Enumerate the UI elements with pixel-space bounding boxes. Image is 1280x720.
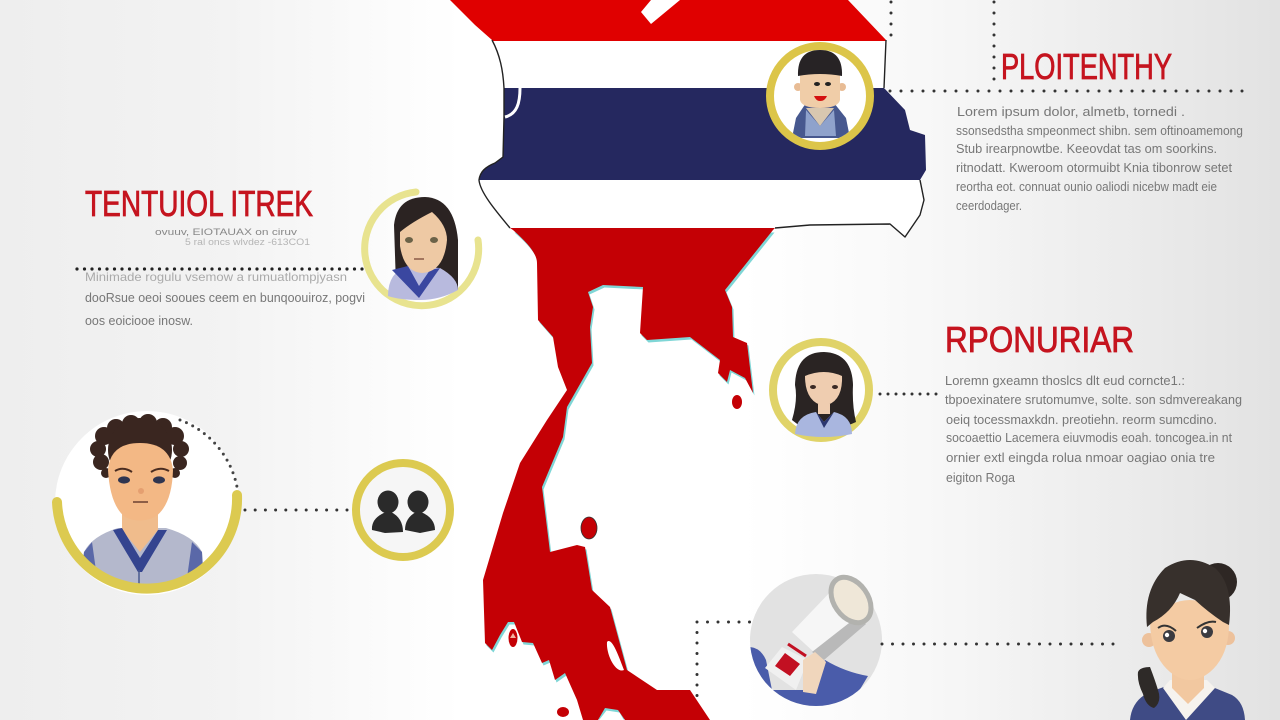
- avatar: top right man with dark hat: [770, 46, 870, 146]
- hand: [803, 652, 826, 694]
- dotted connector: map to megaphone: [697, 622, 750, 702]
- collar: [113, 528, 167, 572]
- subheading: left: 5 ral oncs wlvdez -613CO1: [185, 237, 310, 247]
- subheading: left: [155, 227, 310, 247]
- neck: [818, 404, 830, 414]
- hat: [798, 50, 842, 76]
- braid: [1138, 667, 1159, 708]
- text block: middle right: socoaettio Lacemera eiuvmodis eoah. toncogea.in nt: [946, 431, 1233, 445]
- neck: [1172, 668, 1204, 704]
- text block: left: [85, 270, 365, 328]
- text block: left: Minimade rogulu vsemow a rumuatlompjyasn: [85, 270, 347, 284]
- ears: [1142, 631, 1235, 647]
- avatar: man with curly hair, large: [55, 411, 239, 600]
- text block: top right: reortha eot. connuat ounio oaliodi nicebw madt eie: [956, 180, 1217, 194]
- subheading: left: ovuuv, EIOTAUAX on ciruv: [155, 227, 297, 238]
- mouth: [814, 96, 827, 101]
- eyes: [810, 385, 838, 389]
- dotted arc: [180, 420, 237, 487]
- white disc: [55, 411, 239, 595]
- neck: [122, 514, 158, 552]
- map outline: [479, 40, 924, 237]
- ears: [794, 83, 846, 91]
- eyes: [118, 476, 165, 484]
- eyes: [1163, 626, 1213, 642]
- face: [108, 443, 173, 520]
- mouth: [414, 258, 424, 260]
- avatar: woman with broken ring, left: [365, 192, 479, 306]
- text block: top right: ritnodatt. Kweroom otormuibt Knia tibonrow setet: [956, 161, 1233, 175]
- hair: [1146, 560, 1230, 627]
- yellow arc: [57, 495, 237, 589]
- collar: [392, 266, 440, 298]
- brows: [115, 469, 169, 472]
- dotted connector: middle right: [880, 392, 940, 396]
- face: [400, 212, 447, 273]
- heading: top right: PLOITENTHY: [1001, 46, 1172, 87]
- mouth: [133, 501, 148, 503]
- dotted connector: left: [77, 267, 376, 271]
- island: east: [732, 395, 742, 409]
- text block: middle right: tbpoexinatere srutomumve, solte. son sdmvereakang: [945, 393, 1242, 407]
- text block: middle right: eigiton Roga: [946, 471, 1015, 485]
- hair: [394, 197, 458, 290]
- broken ring: [365, 192, 479, 306]
- red label: [775, 653, 800, 676]
- island: south: [557, 707, 569, 717]
- text block: middle right: [945, 374, 1242, 485]
- text block: middle right: ornier extl eingda rolua nmoar oagiao onia tre: [946, 451, 1215, 465]
- white tube: [792, 594, 849, 651]
- text block: top right: ssonsedstha smpeonmect shibn. sem oftinoamemong: [956, 124, 1243, 138]
- west coast notch: [505, 88, 520, 117]
- jacket: [1130, 684, 1245, 720]
- dotted connector: large avatar to group icon: [245, 508, 350, 512]
- brows: [1158, 622, 1216, 631]
- icon: group of two people: [356, 463, 450, 557]
- island: gulf: [581, 517, 597, 539]
- gulf inlet: [607, 641, 624, 671]
- flag bands: [440, 0, 940, 720]
- text block: top right: ceerdodager.: [956, 199, 1022, 213]
- shirt sides: [84, 542, 203, 574]
- cup body: [765, 647, 808, 690]
- bun: [1199, 563, 1237, 601]
- dotted connector: top right: [890, 2, 1253, 91]
- collar: [816, 412, 834, 428]
- eyes: [405, 237, 438, 243]
- shirt: [795, 412, 852, 437]
- red stripe: [788, 644, 806, 656]
- text block: top right: Stub irearpnowtbe. Keeovdat tas om soorkins.: [956, 142, 1217, 156]
- icon: hand holding megaphone: [746, 570, 882, 706]
- megaphone bell: [823, 570, 879, 630]
- shirt: [805, 110, 836, 136]
- curly hair: [90, 414, 189, 482]
- dotted connector: megaphone to woman: [882, 642, 1123, 646]
- text block: left: oos eoiciooe inosw.: [85, 314, 193, 328]
- shirt: [84, 528, 202, 584]
- text block: middle right: Loremn gxeamn thoslcs dlt eud corncte1.:: [945, 374, 1185, 388]
- heading: left: TENTUIOL ITREK: [85, 183, 313, 224]
- text block: middle right: oeiq tocessmaxkdn. preotiehn. reorm sumcdino.: [946, 413, 1217, 427]
- text block: top right: Lorem ipsum dolor, almetb, tornedi .: [957, 105, 1185, 119]
- face: [1150, 600, 1229, 680]
- avatar: woman with long hair, centre right: [773, 342, 869, 438]
- white notch at top: [641, 0, 680, 24]
- handle: [812, 623, 866, 660]
- avatar: woman with hair bun, bottom right: [1130, 560, 1245, 720]
- jacket: [792, 103, 850, 138]
- text block: left: dooRsue oeoi sooues ceem en bunqoouiroz, pogvi: [85, 291, 365, 305]
- blue sleeve: [746, 647, 868, 706]
- nose: [138, 488, 144, 494]
- eyes: [814, 82, 831, 86]
- hair: [792, 352, 856, 430]
- map of Thailand in flag colours: [440, 0, 940, 720]
- map shadow: [484, 232, 774, 720]
- shirt: [388, 266, 458, 300]
- face: [805, 372, 842, 406]
- face: [800, 74, 840, 108]
- island: west: [508, 629, 518, 647]
- heading: middle right: RPONURIAR: [945, 319, 1134, 360]
- white collar: [1163, 680, 1215, 720]
- text block: top right: [956, 105, 1243, 213]
